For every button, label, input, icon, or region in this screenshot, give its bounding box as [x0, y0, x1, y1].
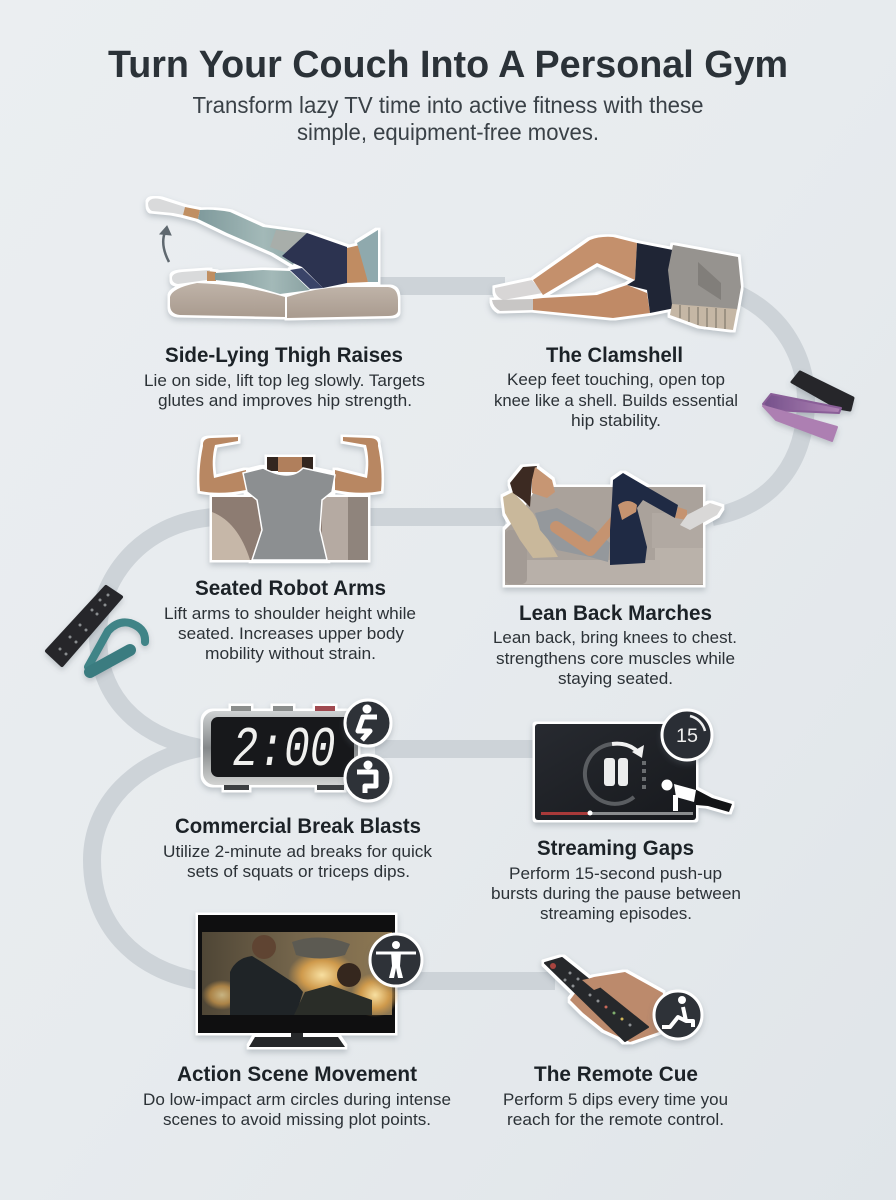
description: Lie on side, lift top leg slowly. Targets: [144, 372, 425, 390]
panel: lean back marches: [493, 466, 737, 688]
description: [143, 1091, 451, 1129]
description: Lift arms to shoulder height while: [164, 605, 416, 623]
panel: streaming gaps: [491, 710, 741, 923]
description: scenes to avoid missing plot points.: [163, 1111, 431, 1129]
description: Keep feet touching, open top: [507, 371, 725, 389]
description: reach for the remote control.: [507, 1111, 724, 1129]
description: [493, 629, 737, 688]
connecting path: [92, 286, 806, 981]
icon: remote and teal band: [47, 587, 145, 672]
description: [491, 865, 741, 923]
subtitle: Transform lazy TV time into active fitness with these: [192, 92, 704, 118]
panel: the clamshell: [492, 237, 741, 430]
description: [163, 843, 433, 881]
pause bars: [604, 758, 628, 786]
description: [503, 1091, 728, 1129]
icon: squat top: [345, 700, 391, 746]
illustration: digital clock: [203, 706, 358, 790]
description: streaming episodes.: [540, 905, 692, 923]
clock readout: 2:00: [232, 718, 336, 782]
description: seated. Increases upper body: [178, 625, 405, 643]
description: sets of squats or triceps dips.: [187, 863, 410, 881]
icon: chair dip: [654, 991, 702, 1039]
description: Do low-impact arm circles during intense: [143, 1091, 451, 1109]
illustration: woman leaning back on sofa: [503, 466, 722, 585]
title: Turn Your Couch Into A Personal Gym: [108, 44, 788, 86]
panel: side-lying thigh raises: [144, 198, 425, 410]
description: bursts during the pause between: [491, 885, 741, 903]
panel: seated robot arms: [164, 437, 416, 663]
heading: The Clamshell: [546, 344, 683, 367]
icon: push-up figure: [662, 780, 696, 811]
description: [144, 372, 425, 410]
description: mobility without strain.: [205, 645, 376, 663]
panel: the remote cue: [503, 958, 728, 1129]
description: Utilize 2-minute ad breaks for quick: [163, 843, 433, 861]
illustration: leg raise on cushions: [148, 198, 398, 318]
illustration: television: [198, 915, 395, 1047]
illustration: clamshell legs and blanket: [492, 237, 741, 330]
icon: arm circles: [370, 934, 422, 986]
description: glutes and improves hip strength.: [158, 392, 412, 410]
description: [164, 605, 416, 663]
description: hip stability.: [571, 412, 661, 430]
icon: squat bottom: [345, 755, 391, 801]
description: Lean back, bring knees to chest.: [493, 629, 737, 647]
description: [494, 371, 738, 430]
heading: Side-Lying Thigh Raises: [165, 344, 403, 367]
description: knee like a shell. Builds essential: [494, 392, 738, 410]
progress bar: [541, 810, 693, 816]
heading: Action Scene Movement: [177, 1063, 417, 1086]
description: staying seated.: [558, 670, 673, 688]
subtitle: simple, equipment-free moves.: [297, 119, 599, 145]
heading: The Remote Cue: [534, 1063, 698, 1086]
icon: resistance bands: [763, 372, 853, 441]
illustration: hand holding remote: [545, 958, 663, 1042]
remote buttons: [550, 963, 632, 1026]
heading: Lean Back Marches: [519, 602, 712, 625]
panel: commercial break blasts: [163, 700, 433, 881]
description: strengthens core muscles while: [496, 650, 735, 668]
panel: action scene movement: [143, 915, 451, 1129]
icon: 15-second timer: [662, 710, 712, 760]
description: Perform 15-second push-up: [509, 865, 722, 883]
subtitle: [192, 92, 704, 145]
heading: Seated Robot Arms: [195, 577, 386, 600]
illustration: robot arms on sofa: [199, 437, 382, 560]
heading: Commercial Break Blasts: [175, 815, 421, 838]
description: Perform 5 dips every time you: [503, 1091, 728, 1109]
icon: 15-second timer: 15: [676, 726, 698, 747]
pause ring: [585, 744, 644, 804]
illustration: paused player: [535, 724, 732, 820]
heading: Streaming Gaps: [537, 837, 694, 860]
movie scene: [202, 932, 399, 1017]
arrow: leg lift direction: [160, 226, 171, 262]
